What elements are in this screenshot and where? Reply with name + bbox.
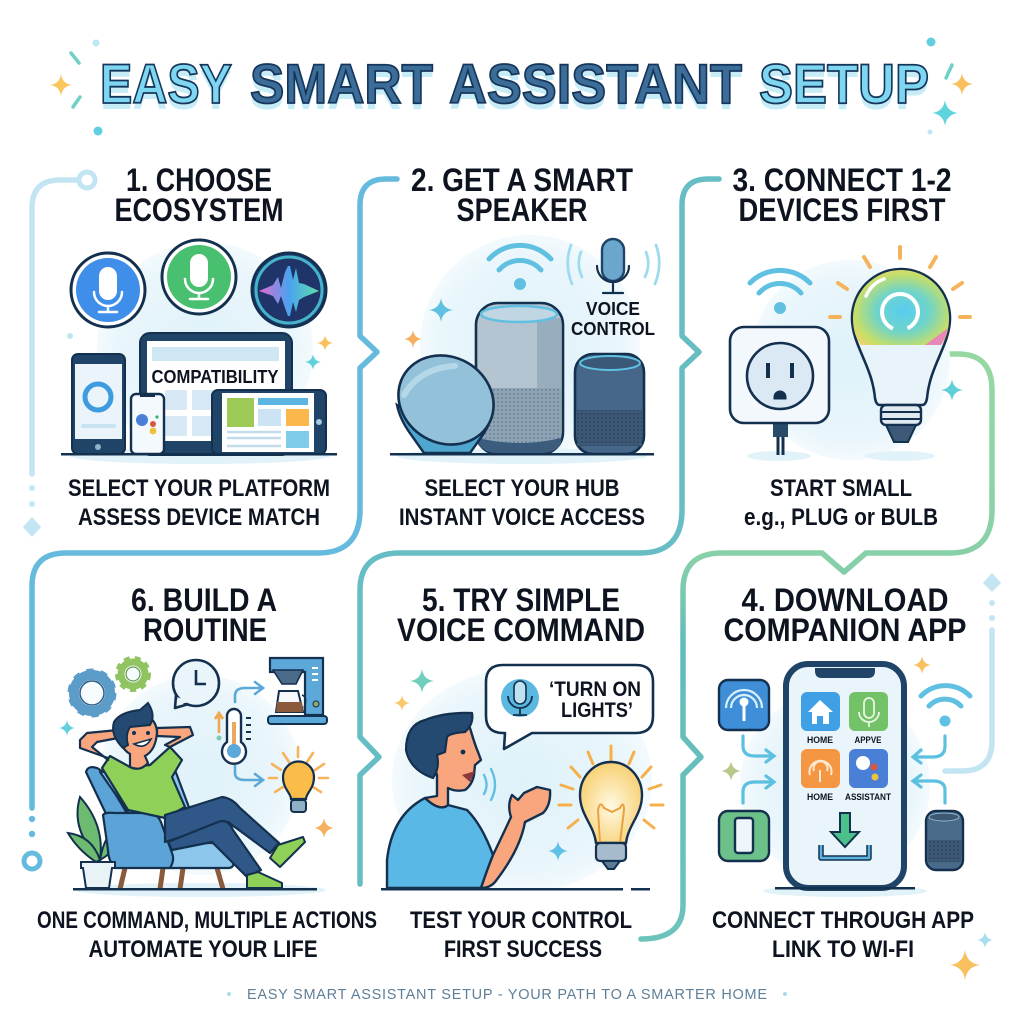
- phone: small: [131, 394, 164, 454]
- panel: step 3 connect devices: [730, 162, 970, 531]
- heading: step 5: VOICE COMMAND: [397, 612, 645, 648]
- heading: step 3: [732, 162, 952, 228]
- caption: step 2: INSTANT VOICE ACCESS: [399, 504, 645, 531]
- heading: step 6: 6. BUILD A: [131, 582, 277, 618]
- icon: relaxing person in armchair: [68, 703, 305, 889]
- connector: step 2 to step 6 path: [24, 179, 397, 869]
- hair: [406, 713, 472, 778]
- caption: step 3: e.g., PLUG or BULB: [744, 504, 938, 531]
- caption: step 2: SELECT YOUR HUB: [424, 475, 620, 502]
- icon: gears: [70, 658, 149, 715]
- caption: step 6: ONE COMMAND, MULTIPLE ACTIONS: [37, 907, 377, 934]
- title: EASY: [100, 52, 232, 115]
- arms: [80, 727, 193, 760]
- head: [425, 728, 481, 807]
- connector: step 1 path: [23, 172, 95, 537]
- caption: step 6: AUTOMATE YOUR LIFE: [88, 936, 318, 963]
- caption: step 1: SELECT YOUR PLATFORM: [68, 475, 330, 502]
- caption: step 4: [712, 907, 974, 963]
- label: voice control: CONTROL: [571, 319, 655, 339]
- monitor: compatibility: COMPATIBILITY: [152, 366, 279, 387]
- head: [120, 713, 157, 769]
- phone: APPVE: [854, 735, 882, 746]
- icon: glowing bulb: [559, 746, 663, 869]
- shoes: [247, 837, 305, 888]
- phone: ASSISTANT: [845, 792, 891, 803]
- icon: green assistant: [162, 240, 236, 314]
- icon: blue assistant: [71, 253, 145, 327]
- heading: step 1: ECOSYSTEM: [114, 192, 284, 228]
- person speaking: [387, 713, 550, 888]
- connector: step 3 to step 5 path: [360, 179, 719, 884]
- caption: step 5: [410, 907, 632, 963]
- chair: [86, 767, 233, 889]
- icon: microphone: [568, 239, 659, 293]
- icon: speaker: [926, 811, 963, 870]
- title: [100, 52, 929, 121]
- heading: step 1: 1. CHOOSE: [126, 162, 272, 198]
- heading: step 1: [114, 162, 284, 228]
- phone: left: [72, 354, 125, 454]
- caption: step 6: [37, 907, 377, 963]
- heading: step 5: [397, 582, 645, 648]
- connector: step 4 tail: [945, 573, 1001, 771]
- arm: [481, 787, 550, 888]
- icon: wifi tile: [719, 680, 769, 730]
- title: SMART: [250, 58, 433, 121]
- heading: step 6: ROUTINE: [143, 612, 267, 648]
- shirt: [387, 798, 493, 888]
- caption: step 3: [744, 475, 938, 531]
- heading: step 2: SPEAKER: [456, 192, 588, 228]
- icon: thermometer: [215, 709, 251, 764]
- arrows: into phone: [743, 736, 945, 803]
- title: ASSISTANT: [449, 52, 742, 115]
- caption: step 1: [68, 475, 330, 531]
- heading: step 2: 2. GET A SMART: [411, 162, 633, 198]
- caption: step 3: START SMALL: [770, 475, 912, 502]
- heading: step 3: 3. CONNECT 1-2: [732, 162, 952, 198]
- speech bubble: [486, 665, 653, 749]
- title: ASSISTANT: [449, 58, 742, 121]
- label: voice control: VOICE: [586, 299, 640, 319]
- title decorations: [50, 38, 973, 136]
- arrows: routine flow: [235, 682, 263, 786]
- icon: wifi: [489, 245, 551, 290]
- pot: [81, 862, 115, 888]
- footer: EASY SMART ASSISTANT SETUP - YOUR PATH TO A SMARTER HOME: [247, 987, 767, 1003]
- title: EASY: [100, 58, 232, 121]
- caption: step 5: FIRST SUCCESS: [444, 936, 602, 963]
- panel: step 6 build routine: [37, 582, 377, 963]
- caption: step 5: TEST YOUR CONTROL: [410, 907, 632, 934]
- panel: step 4 companion app: [712, 582, 993, 980]
- icon: smart plug: [730, 327, 829, 455]
- icon: light bulb: [269, 747, 328, 812]
- phone: [786, 664, 904, 888]
- tablet: [212, 390, 326, 454]
- icon: wifi: [921, 686, 970, 726]
- monitor: compatibility: [140, 333, 292, 455]
- label: voice control: [571, 299, 655, 339]
- panel: step 5 voice command: [381, 582, 663, 963]
- icon: wifi: [750, 270, 810, 314]
- icon: sound wave assistant: [252, 253, 326, 327]
- plant: [68, 797, 120, 862]
- icon: phone tile: [719, 811, 769, 861]
- speech bubble: LIGHTS’: [561, 699, 633, 722]
- shirt: [102, 747, 185, 818]
- ground line: [61, 453, 337, 456]
- connector: step 3 bulb to step 4 to step 5 path: [641, 354, 992, 939]
- heading: step 4: [724, 582, 966, 648]
- caption: step 1: ASSESS DEVICE MATCH: [78, 504, 320, 531]
- caption: step 4: CONNECT THROUGH APP: [712, 907, 974, 934]
- phone: HOME: [807, 735, 833, 746]
- speaker: small dark: [575, 354, 644, 454]
- caption: step 2: [399, 475, 645, 531]
- title: SMART: [250, 52, 433, 115]
- title: SETUP: [759, 52, 929, 115]
- heading: step 5: 5. TRY SIMPLE: [422, 582, 620, 618]
- icon: smart bulb: [830, 247, 970, 442]
- icon: coffee maker: [268, 658, 327, 724]
- heading: step 3: DEVICES FIRST: [738, 192, 946, 228]
- hair: [113, 703, 153, 748]
- speaker: round: [382, 338, 510, 462]
- panel: step 1 choose ecosystem: [61, 162, 337, 531]
- heading: step 6: [131, 582, 277, 648]
- heading: step 4: COMPANION APP: [724, 612, 966, 648]
- icon: clock: [173, 660, 219, 708]
- speech bubble: ‘TURN ON: [549, 678, 641, 701]
- icon: download: [821, 813, 869, 858]
- heading: step 2: [411, 162, 633, 228]
- phone: HOME: [807, 792, 833, 803]
- panel: step 2 smart speaker: [382, 162, 659, 531]
- heading: step 4: 4. DOWNLOAD: [742, 582, 948, 618]
- speaker: tall: [476, 303, 563, 454]
- legs: [165, 797, 279, 877]
- caption: step 4: LINK TO WI-FI: [772, 936, 914, 963]
- title: SETUP: [759, 58, 929, 121]
